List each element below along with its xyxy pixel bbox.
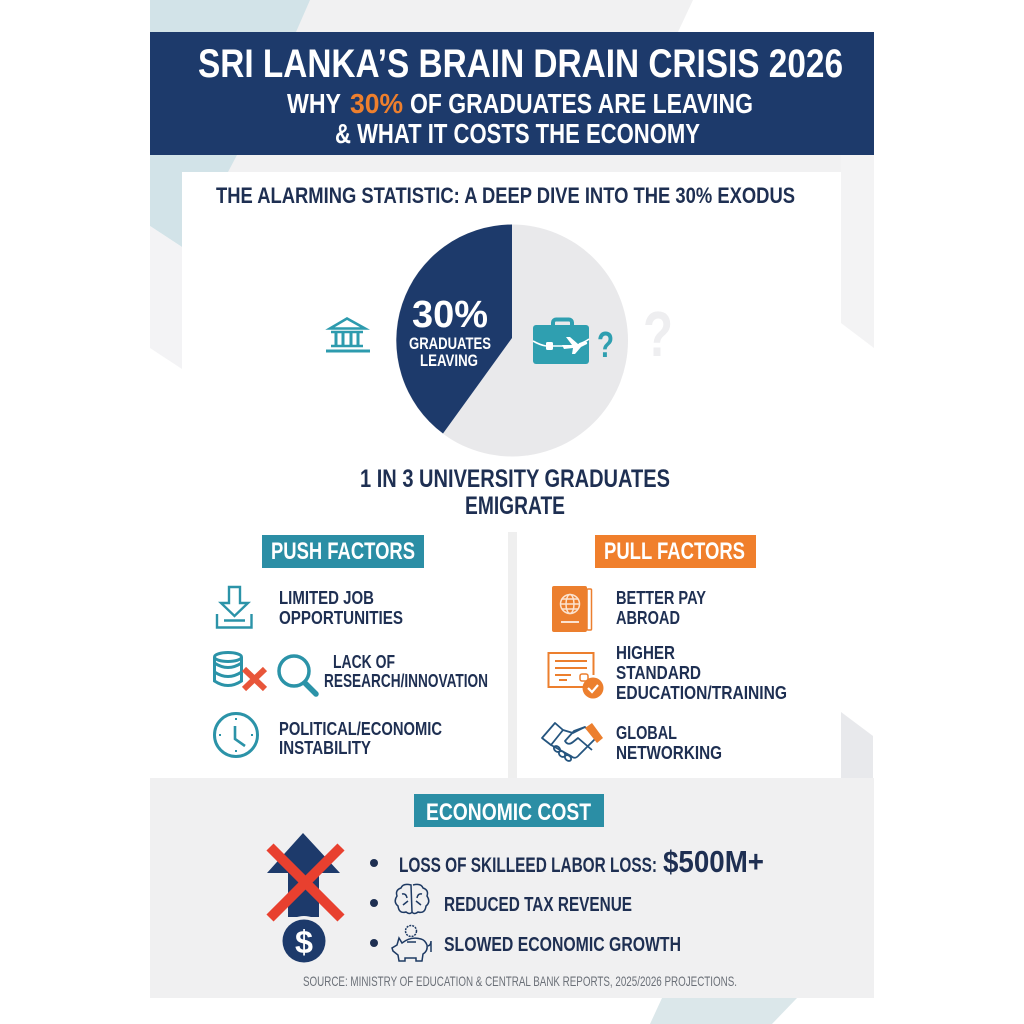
bullet: skilled labor loss [370, 844, 764, 879]
pie label: graduates leaving: LEAVING [420, 351, 478, 370]
push factors badge: PUSH FACTORS [271, 538, 415, 565]
subtitle line one: 30% [350, 88, 403, 119]
bullet: reduced tax revenue: REDUCED TAX REVENUE [444, 894, 632, 916]
subtitle line two: & WHAT IT COSTS THE ECONOMY [335, 118, 700, 149]
section heading: THE ALARMING STATISTIC: A DEEP DIVE INTO THE 30% EXODUS [216, 183, 795, 208]
bullet: skilled labor loss: LOSS OF SKILLEED LABOR LOSS: [399, 854, 657, 877]
icon: database with red cross [214, 652, 265, 689]
icon: passport [552, 586, 592, 632]
icon: download tray [217, 587, 252, 628]
bullet: slowed economic growth: SLOWED ECONOMIC GROWTH [444, 934, 681, 956]
economic cost badge [414, 794, 604, 827]
item: higher standard education/training: STANDARD [616, 663, 701, 683]
icon: teal question mark: ? [597, 324, 614, 365]
pie label: graduates leaving [409, 334, 491, 370]
source note: SOURCE: MINISTRY OF EDUCATION & CENTRAL BANK REPORTS, 2025/2026 PROJECTIONS. [303, 973, 737, 989]
bullet: slowed economic growth [370, 926, 681, 961]
panel: header banner [150, 32, 874, 155]
item: better pay abroad [616, 588, 706, 628]
bullet: skilled labor loss: $500M+ [663, 844, 764, 879]
icon: university building [326, 318, 370, 351]
statistic caption: 1 IN 3 UNIVERSITY GRADUATES [360, 465, 670, 493]
item: limited job opportunities: OPPORTUNITIES [279, 608, 403, 628]
pie chart [396, 224, 628, 456]
item: limited job opportunities [279, 588, 403, 628]
panel: pull factors [542, 535, 787, 763]
item: lack of research/innovation: LACK OF [333, 652, 395, 672]
icon: handshake [542, 723, 603, 762]
pie label: graduates leaving: GRADUATES [409, 334, 491, 353]
subtitle line one: OF GRADUATES ARE LEAVING [410, 88, 753, 119]
statistic caption [360, 465, 670, 520]
icon: piggy bank [392, 926, 431, 961]
economic cost badge: ECONOMIC COST [426, 799, 591, 826]
item: higher standard education/training: HIGHER [616, 643, 675, 663]
item: higher standard education/training: EDUCATION/TRAINING [616, 683, 787, 703]
pie label: 30%: 30% [412, 294, 488, 336]
item: better pay abroad: BETTER PAY [616, 588, 706, 608]
icon: faint question mark: ? [643, 298, 673, 370]
panel: push factors [214, 535, 488, 758]
bullet: reduced tax revenue [370, 884, 632, 916]
icon: crossed-out arrow with dollar coin [267, 833, 341, 964]
pull factors badge: PULL FACTORS [604, 538, 745, 565]
item: global networking [616, 723, 722, 763]
item: global networking: GLOBAL [616, 723, 677, 743]
subtitle line one [287, 88, 753, 119]
panel: alarming statistic [182, 172, 841, 530]
pull factors badge [595, 535, 756, 568]
title: SRI LANKA’S BRAIN DRAIN CRISIS 2026 [198, 42, 843, 86]
panel: economic cost [150, 778, 874, 998]
item: political/economic instability [279, 719, 442, 758]
icon: brain [395, 884, 429, 914]
subtitle line one: WHY [287, 88, 341, 119]
icon: magnifying glass [279, 656, 316, 694]
item: limited job opportunities: LIMITED JOB [279, 588, 374, 608]
item: global networking: NETWORKING [616, 743, 722, 763]
icon: crossed-out arrow with dollar coin: $ [295, 924, 313, 960]
icon: briefcase with plane [533, 320, 589, 364]
item: lack of research/innovation [324, 652, 488, 691]
icon: clock [214, 714, 258, 756]
item: lack of research/innovation: RESEARCH/INNOVATION [324, 671, 488, 691]
statistic caption: EMIGRATE [465, 492, 565, 520]
item: higher standard education/training [616, 643, 787, 703]
item: political/economic instability: INSTABILITY [279, 738, 371, 758]
item: political/economic instability: POLITICAL/ECONOMIC [279, 719, 442, 739]
push factors badge [262, 535, 424, 568]
item: better pay abroad: ABROAD [616, 608, 680, 628]
icon: certificate with check [548, 653, 604, 698]
